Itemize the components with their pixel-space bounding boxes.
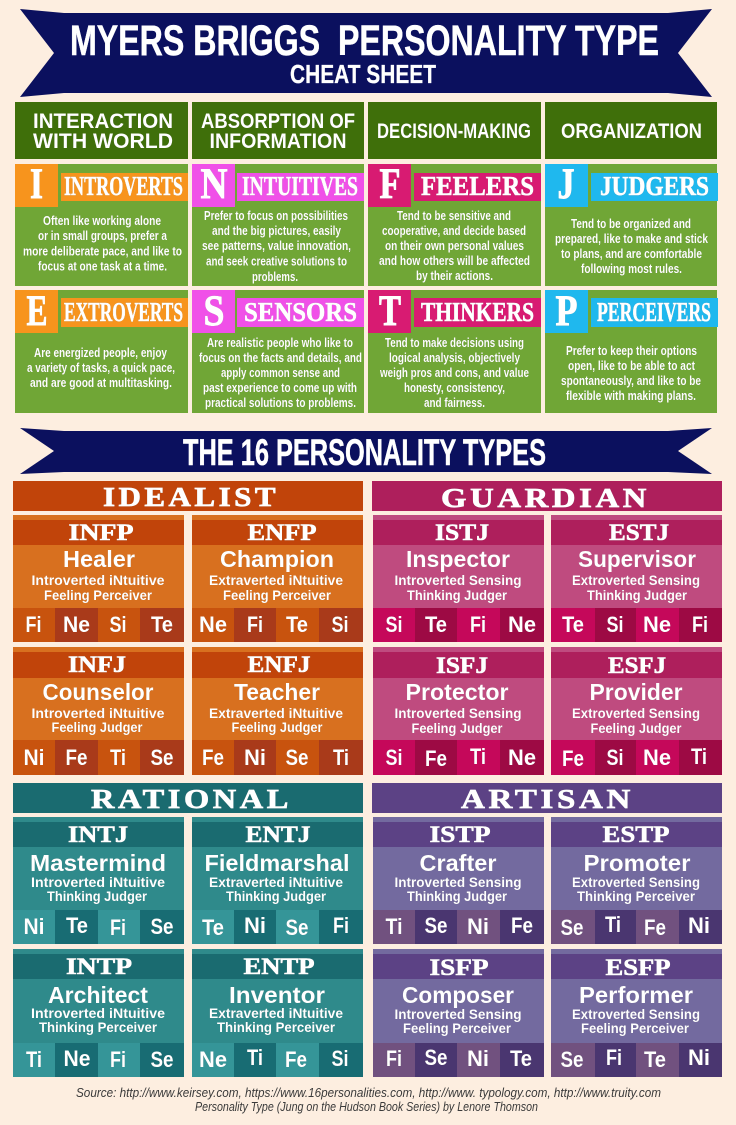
card: ESFJ: Fe [562, 746, 584, 771]
card: ESFJ: Si [606, 745, 624, 770]
section heading: rational [13, 783, 363, 814]
card: ESFP: Performer [579, 982, 693, 1008]
card: ISTP: Ti [386, 914, 402, 939]
card: ENFP: Extraverted iNtuitive [209, 572, 343, 588]
panel: introverts: more deliberate pace, and like to [23, 244, 182, 258]
panel: thinkers: honesty, consistency, [404, 380, 505, 395]
panel: sensors: Are realistic people who like to [207, 335, 353, 350]
card: ESFJ: ESFJ [608, 653, 666, 678]
panel: sensors: apply common sense and [221, 365, 340, 380]
card: ISFP: ISFP [430, 955, 488, 980]
card: ISTJ: ISTJ [435, 520, 489, 545]
card: ENFP: Champion [220, 546, 334, 572]
card: ESFJ: Ne [643, 745, 671, 770]
card: ESTP: Se [560, 915, 584, 940]
card: ESTJ: Ne [643, 612, 671, 637]
panel: feelers: and how others will be affected [379, 253, 530, 268]
card: ENFP: Fi [247, 612, 263, 637]
card: ENFJ: Se [286, 745, 308, 770]
card: INFJ: Counselor [42, 679, 154, 705]
panel: interaction with world heading: INTERACTION [33, 110, 173, 133]
card: ISFJ: Ne [508, 745, 536, 770]
card: ENTP: Fe [285, 1047, 307, 1072]
panel: feelers: on their own personal values [385, 238, 524, 253]
source credits [76, 1085, 661, 1114]
card: ISTP: Crafter [420, 850, 497, 876]
card: ENTP: Inventor [229, 982, 325, 1008]
panel: thinkers: logical analysis, objectively [389, 350, 521, 365]
card: ENFJ: ENFJ [248, 652, 310, 677]
card: ISTP: ISTP [430, 822, 490, 847]
panel: feelers: F [380, 161, 400, 208]
card: ESTP: Ti [605, 912, 621, 937]
card: ENTJ: Te [202, 915, 224, 940]
card: ESFP: Extroverted Sensing [572, 1006, 700, 1022]
card: INFP: Feeling Perceiver [44, 587, 153, 603]
panel: decision-making heading [368, 102, 541, 159]
card: ESTP: Extroverted Sensing [572, 874, 700, 890]
card: ENFJ: Extraverted iNtuitive [209, 705, 343, 721]
card: INTP: Ne [64, 1046, 90, 1071]
card: ESTJ [551, 515, 722, 642]
card: ISFP: Fi [386, 1046, 402, 1071]
card: ENFP: ENFP [248, 520, 316, 545]
card: ISFJ: Feeling Judger [412, 720, 503, 736]
card: ESFP: Te [644, 1047, 666, 1072]
card: ENFJ: Teacher [234, 679, 320, 705]
card: ESFJ: Extroverted Sensing [572, 705, 700, 721]
card: ENTP: Thinking Perceiver [217, 1019, 336, 1035]
card: ESTP: Ni [688, 913, 710, 938]
card: ENFP: Feeling Perceiver [223, 587, 332, 603]
card: ESFJ: Provider [590, 679, 683, 705]
source credits: Personality Type (Jung on the Hudson Book Series) by Lenore Thomson [195, 1099, 538, 1114]
panel: judgers [545, 161, 718, 286]
card: ISFJ: Ti [470, 744, 486, 769]
card: INFP: Fi [26, 612, 42, 637]
panel: perceivers [545, 288, 718, 413]
card: INTP [13, 949, 184, 1077]
panel: thinkers: and fairness. [424, 395, 485, 410]
panel: sensors: past experience to come up with [203, 380, 357, 395]
card: INFJ: Ni [24, 745, 44, 770]
section heading: idealist [13, 481, 363, 512]
card: ESFP: Feeling Perceiver [581, 1020, 690, 1036]
card: ISTP [373, 817, 544, 944]
card: ESFP: ESFP [606, 955, 670, 980]
card: ESTP [551, 817, 722, 944]
card: ISTJ [373, 515, 544, 642]
card: ISFJ: Protector [406, 679, 509, 705]
card: INFJ: Introverted iNtuitive [32, 705, 165, 721]
card: ISTP: Se [424, 913, 448, 938]
panel: intuitives: and the big pictures, easily [212, 223, 342, 238]
section heading: guardian: GUARDIAN [441, 483, 650, 513]
card: ESTJ: Si [606, 612, 624, 637]
card: ISFP: Feeling Perceiver [403, 1020, 512, 1036]
card: ESFJ: Ti [691, 744, 707, 769]
panel: extroverts: EXTROVERTS [64, 297, 183, 327]
card: INFJ: INFJ [68, 652, 126, 677]
card: ISFJ: Si [386, 745, 402, 770]
card: INTJ: Fi [110, 915, 126, 940]
panel: judgers: following most rules. [581, 261, 682, 276]
panel: perceivers: P [556, 288, 578, 335]
card: ENTP: Ne [199, 1047, 227, 1072]
card: ENFP: Si [332, 612, 348, 637]
card: ISFP: Te [510, 1046, 532, 1071]
panel: introverts: or in small groups, prefer a [38, 228, 168, 243]
panel: intuitives: INTUITIVES [242, 171, 358, 201]
panel: sensors [192, 288, 364, 413]
card: ENTP: Extraverted iNtuitive [209, 1005, 343, 1021]
source credits: Source: http://www.keirsey.com, https://www.16personalities.com, http://www. typology.com, http://www.truity.com [76, 1085, 661, 1100]
card: ENTJ: Extraverted iNtuitive [209, 874, 343, 890]
panel: intuitives [192, 161, 364, 286]
card: ENFP: Te [286, 612, 308, 637]
panel: perceivers: open, like to be able to act [568, 358, 696, 373]
panel: feelers: cooperative, and decide based [382, 223, 526, 238]
card: INTP: Se [150, 1047, 174, 1072]
card: INTP: Introverted iNtuitive [31, 1005, 165, 1021]
card: ENFJ: Ti [333, 745, 349, 770]
card: ESTP: Thinking Perceiver [577, 888, 696, 904]
title banner [20, 9, 712, 97]
panel: perceivers: Prefer to keep their options [566, 343, 697, 358]
card: INTJ: INTJ [68, 822, 128, 847]
card: ENTJ: Ni [244, 913, 266, 938]
panel: organization heading: ORGANIZATION [561, 120, 702, 143]
card: ISTJ: Fi [470, 612, 486, 637]
card: ENFJ: Ni [244, 745, 266, 770]
card: ESFP [551, 949, 722, 1077]
card: ISFJ: ISFJ [436, 653, 488, 678]
panel: introverts: Often like working alone [43, 213, 161, 228]
card: ENFJ: Fe [202, 745, 224, 770]
card: INTJ: Thinking Judger [47, 888, 148, 904]
card: INTP: Thinking Perceiver [39, 1019, 158, 1035]
panel: interaction with world heading: WITH WORLD [33, 130, 173, 153]
panel: sensors: S [204, 288, 224, 335]
panel: intuitives: N [200, 161, 228, 208]
card: ENTP: ENTP [244, 954, 314, 979]
card: ENTJ: Fi [333, 913, 349, 938]
card: ISTP: Fe [511, 913, 533, 938]
card: ISFP [373, 949, 544, 1077]
card: ESTJ: Te [562, 612, 584, 637]
panel: intuitives: and seek creative solutions to [206, 254, 347, 268]
card: INFP [13, 515, 184, 642]
panel: intuitives: problems. [252, 269, 298, 284]
panel: extroverts: E [26, 288, 48, 335]
card: ISTJ: Ne [508, 612, 536, 637]
card: ISTP: Thinking Judger [407, 888, 508, 904]
card: ESTJ: Fi [692, 612, 708, 637]
panel: interaction with world heading [15, 102, 188, 159]
panel: extroverts: Are energized people, enjoy [34, 345, 168, 360]
card: ISTJ: Te [425, 612, 447, 637]
card: ISTJ: Inspector [406, 546, 510, 572]
card: ISTP: Ni [467, 914, 489, 939]
card: ENTJ: Se [286, 915, 308, 940]
panel: feelers: FEELERS [421, 171, 534, 201]
card: INFJ: Ti [110, 745, 126, 770]
card: ISFJ: Introverted Sensing [394, 705, 522, 721]
card: ISTJ: Thinking Judger [407, 587, 508, 603]
panel: introverts: focus at one task at a time. [38, 258, 167, 274]
section heading: rational: RATIONAL [91, 784, 292, 814]
card: ENFJ [192, 647, 363, 775]
card: ISFJ: Fe [425, 746, 447, 771]
panel: introverts [15, 161, 188, 286]
card: INFJ: Fe [66, 745, 88, 770]
card: ESFJ [551, 647, 722, 775]
card: ESFP: Se [560, 1047, 584, 1072]
card: INFP: INFP [68, 520, 134, 545]
panel: absorption of information heading: INFORMATION [210, 130, 346, 153]
card: ENTP: Si [332, 1046, 348, 1071]
card: ESFP: Fi [606, 1045, 622, 1070]
card: INFP: Introverted iNtuitive [32, 572, 165, 588]
panel: perceivers: flexible with making plans. [566, 388, 696, 403]
panel: decision-making heading: DECISION-MAKING [377, 120, 531, 143]
card: ESFP: Ni [688, 1045, 710, 1070]
panel: introverts: INTROVERTS [64, 171, 183, 201]
card: ESTP: Promoter [584, 850, 691, 876]
card: INTP: INTP [66, 954, 132, 979]
card: ENFJ: Feeling Judger [232, 719, 323, 735]
card: INTJ: Introverted iNtuitive [31, 874, 165, 890]
card: INFJ [13, 647, 184, 775]
card: INTP: Architect [48, 982, 148, 1008]
card: ESFJ: Feeling Judger [590, 720, 682, 736]
card: INTP: Ti [26, 1047, 42, 1072]
panel: sensors: SENSORS [244, 297, 357, 327]
card: ENTP: Ti [247, 1045, 263, 1070]
section heading: idealist: IDEALIST [103, 482, 279, 512]
section heading: artisan [372, 783, 722, 814]
section heading: artisan: ARTISAN [461, 784, 634, 814]
card: ISTP: Introverted Sensing [394, 874, 522, 890]
panel: sensors: focus on the facts and details, and [199, 350, 362, 365]
card: ENTJ: Thinking Judger [226, 888, 327, 904]
card: INTJ: Se [150, 914, 174, 939]
card: INFP: Te [151, 612, 173, 637]
card: ENFP [192, 515, 363, 642]
panel: thinkers: Tend to make decisions using [385, 335, 524, 350]
card: ISFP: Composer [402, 982, 514, 1008]
panel: feelers: Tend to be sensitive and [397, 208, 511, 223]
card: ISFP: Se [424, 1045, 448, 1070]
panel: absorption of information heading [192, 102, 364, 159]
card: ESTP: ESTP [602, 822, 670, 847]
card: ESTJ: Extroverted Sensing [572, 572, 700, 588]
panel: sensors: practical solutions to problems. [205, 395, 356, 410]
banner: the 16 personality types: THE 16 PERSONALITY TYPES [183, 432, 546, 473]
card: INFP: Ne [63, 612, 90, 637]
card: ISTJ: Introverted Sensing [394, 572, 522, 588]
card: ENTJ [192, 817, 363, 944]
banner: the 16 personality types [20, 428, 712, 474]
card: INTJ: Te [66, 913, 88, 938]
card: ISFJ [373, 647, 544, 775]
card: INFP: Healer [63, 546, 135, 572]
panel: intuitives: see patterns, value innovation, [202, 238, 351, 253]
card: INFJ: Feeling Judger [52, 719, 143, 735]
panel: intuitives: Prefer to focus on possibilities [204, 208, 348, 223]
card: ENFP: Ne [199, 612, 227, 637]
panel: thinkers [368, 288, 541, 413]
card: INTP: Fi [110, 1047, 126, 1072]
panel: thinkers: THINKERS [421, 297, 534, 327]
card: ESTP: Fe [644, 915, 666, 940]
card: INFP: Si [110, 612, 126, 637]
card: ESTJ: Supervisor [578, 546, 696, 572]
card: INTJ: Mastermind [30, 850, 166, 876]
panel: judgers: JUDGERS [600, 171, 709, 201]
card: ENTP [192, 949, 363, 1077]
panel: feelers: by their actions. [416, 268, 493, 283]
card: INTJ [13, 817, 184, 944]
card: ISTJ: Si [386, 612, 402, 637]
panel: introverts: I [30, 161, 43, 208]
card: INTJ: Ni [24, 914, 44, 939]
card: ISFP: Ni [467, 1046, 489, 1071]
panel: absorption of information heading: ABSORPTION OF [201, 110, 355, 133]
card: ESTJ: ESTJ [609, 520, 669, 545]
card: INFJ: Se [150, 745, 174, 770]
card: ISFP: Introverted Sensing [394, 1006, 522, 1022]
card: ENTJ: ENTJ [246, 822, 310, 847]
section heading: guardian [372, 481, 722, 513]
panel: extroverts [15, 288, 188, 413]
panel: thinkers: T [379, 288, 401, 335]
panel: extroverts: and are good at multitasking. [30, 375, 172, 390]
panel: judgers: J [558, 161, 574, 208]
panel: organization heading [545, 102, 717, 159]
subtitle: CHEAT SHEET [290, 59, 436, 89]
card: ENTJ: Fieldmarshal [204, 850, 350, 876]
panel: judgers: Tend to be organized and [571, 216, 691, 231]
panel: feelers [368, 161, 541, 286]
card: ESTJ: Thinking Judger [587, 587, 688, 603]
panel: thinkers: weigh pros and cons, and value [379, 365, 529, 380]
panel: extroverts: a variety of tasks, a quick pace, [27, 360, 175, 375]
